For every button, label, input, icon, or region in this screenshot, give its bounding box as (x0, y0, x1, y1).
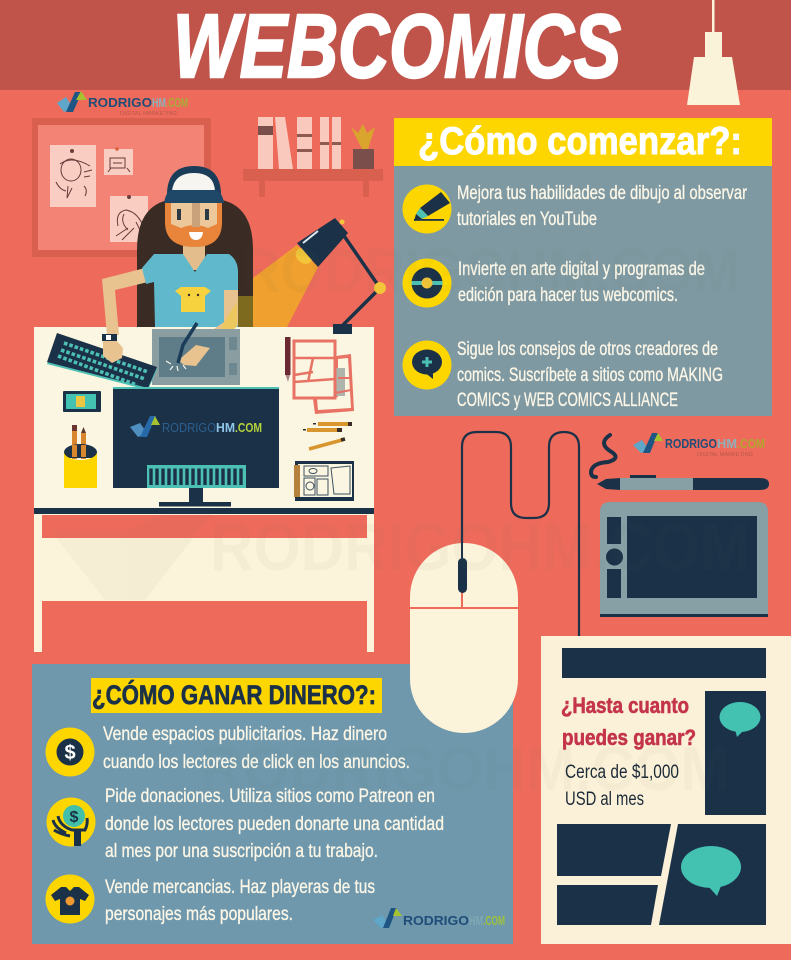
monitor vent (147, 465, 246, 488)
text: tip three (457, 339, 723, 411)
logo: top left: HM (152, 95, 166, 110)
text: donations: Pide donaciones. Utiliza sitios como Patreon en (105, 785, 435, 807)
logo: bottom panel (373, 908, 505, 928)
logo: bottom panel: RODRIGO (403, 913, 469, 928)
heading (561, 693, 696, 750)
text: donations (105, 785, 444, 862)
icon: dollar coin (46, 728, 94, 776)
logo: top left: RODRIGO (88, 95, 152, 110)
shirt (142, 254, 238, 327)
tall comic frame with bubble (705, 691, 766, 815)
logo: top left: DIGITAL MARKETING (120, 111, 177, 117)
icon: hand with coin: $ (70, 809, 79, 826)
heading: ¿Cómo comenzar?: (418, 120, 742, 163)
neck (183, 245, 205, 270)
logo on monitor: RODRIGO (162, 420, 216, 435)
monitor (113, 387, 279, 506)
logo: right: HM (717, 436, 737, 451)
shirt monster (175, 287, 211, 312)
sketch: creature (110, 195, 148, 242)
icon: potted plant (351, 124, 375, 169)
tablet on desk (152, 323, 240, 385)
panel: como ganar dinero (32, 664, 513, 944)
heading: ¿CÓMO GANAR DINERO?: (92, 679, 376, 710)
watermarks (50, 237, 750, 804)
notebook (294, 461, 354, 501)
phone (63, 391, 101, 412)
books (258, 117, 341, 169)
icon: t-shirt (46, 874, 94, 924)
desk (34, 327, 374, 653)
earnings text (565, 762, 679, 810)
header band (0, 0, 791, 97)
icon: pen (402, 184, 452, 234)
icon: ceiling lamp (687, 0, 740, 105)
logo: right: RODRIGO (665, 436, 717, 451)
bookshelf (243, 117, 383, 197)
comic pen (285, 337, 290, 382)
icon: speech bubble (402, 340, 452, 390)
logo: right (633, 433, 765, 458)
text: tip two (458, 259, 705, 306)
corkboard with sketches (32, 118, 211, 257)
text: ads (103, 723, 410, 773)
text: tip two: edición para hacer tus webcomics. (458, 285, 678, 306)
left arm (102, 268, 148, 335)
logo on monitor: .COM (235, 420, 262, 435)
logo: bottom panel: .COM (483, 913, 505, 928)
left hand and watch (102, 334, 123, 363)
text: ads: Vende espacios publicitarios. Haz dinero (103, 723, 387, 745)
heading: ¿Hasta cuanto (561, 693, 689, 718)
heading: puedes ganar? (562, 725, 696, 750)
logo on monitor (130, 416, 262, 437)
cap (164, 166, 224, 203)
logo on monitor: HM (216, 420, 235, 435)
logo: right: DIGITAL MARKETING (697, 452, 753, 458)
comic pages (294, 341, 354, 414)
logo: right: .COM (737, 436, 765, 451)
text: ads: cuando los lectores de click en los anuncios. (103, 751, 410, 773)
comic header bar (562, 648, 766, 678)
icon: disc (402, 258, 452, 308)
text: merchandise: personajes más populares. (105, 903, 293, 925)
drawing tablet (600, 502, 768, 617)
character: artist (102, 166, 253, 366)
lamp light beam (237, 245, 318, 327)
desk pencils (303, 422, 352, 449)
computer mouse (410, 543, 518, 733)
stylus and hand (179, 345, 210, 366)
desk lamp (237, 218, 386, 334)
text: donations: donde los lectores pueden donarte una cantidad (105, 813, 444, 835)
sketch: girl (50, 145, 96, 207)
face (165, 202, 222, 247)
pencil cup (64, 425, 97, 488)
text: tip three: COMICS y WEB COMICS ALLIANCE (457, 390, 678, 411)
text: tip one: tutoriales en YouTube (457, 209, 597, 230)
panel: comic page earnings (541, 636, 791, 944)
panel: como comenzar (394, 118, 772, 416)
stylus pen (597, 475, 769, 490)
icon: ink squiggle (591, 435, 616, 477)
earnings text: Cerca de $1,000 (565, 762, 679, 783)
right arm (178, 290, 238, 366)
logo: top left (57, 91, 188, 117)
keyboard (47, 333, 157, 390)
icon: dollar coin: $ (64, 742, 76, 764)
icon: hand with coin (46, 798, 96, 846)
logo: top left: .COM (166, 95, 188, 110)
watermarks: RODRIGOHM.COM (200, 735, 730, 804)
mouse cable (462, 432, 579, 637)
text: tip two: Invierte en arte digital y programas de (458, 259, 705, 280)
bottom comic frames (557, 824, 766, 925)
watermarks: RODRIGOHM.COM (240, 237, 740, 306)
text: merchandise (105, 876, 375, 925)
earnings text: USD al mes (565, 789, 644, 810)
chair (137, 200, 253, 327)
text: merchandise: Vende mercancias. Haz playeras de tus (105, 876, 375, 898)
sketch: object (104, 147, 133, 175)
text: donations: al mes por una suscripción a tu trabajo. (105, 840, 378, 862)
logo: bottom panel: HM (469, 913, 483, 928)
text: tip one (457, 183, 748, 230)
